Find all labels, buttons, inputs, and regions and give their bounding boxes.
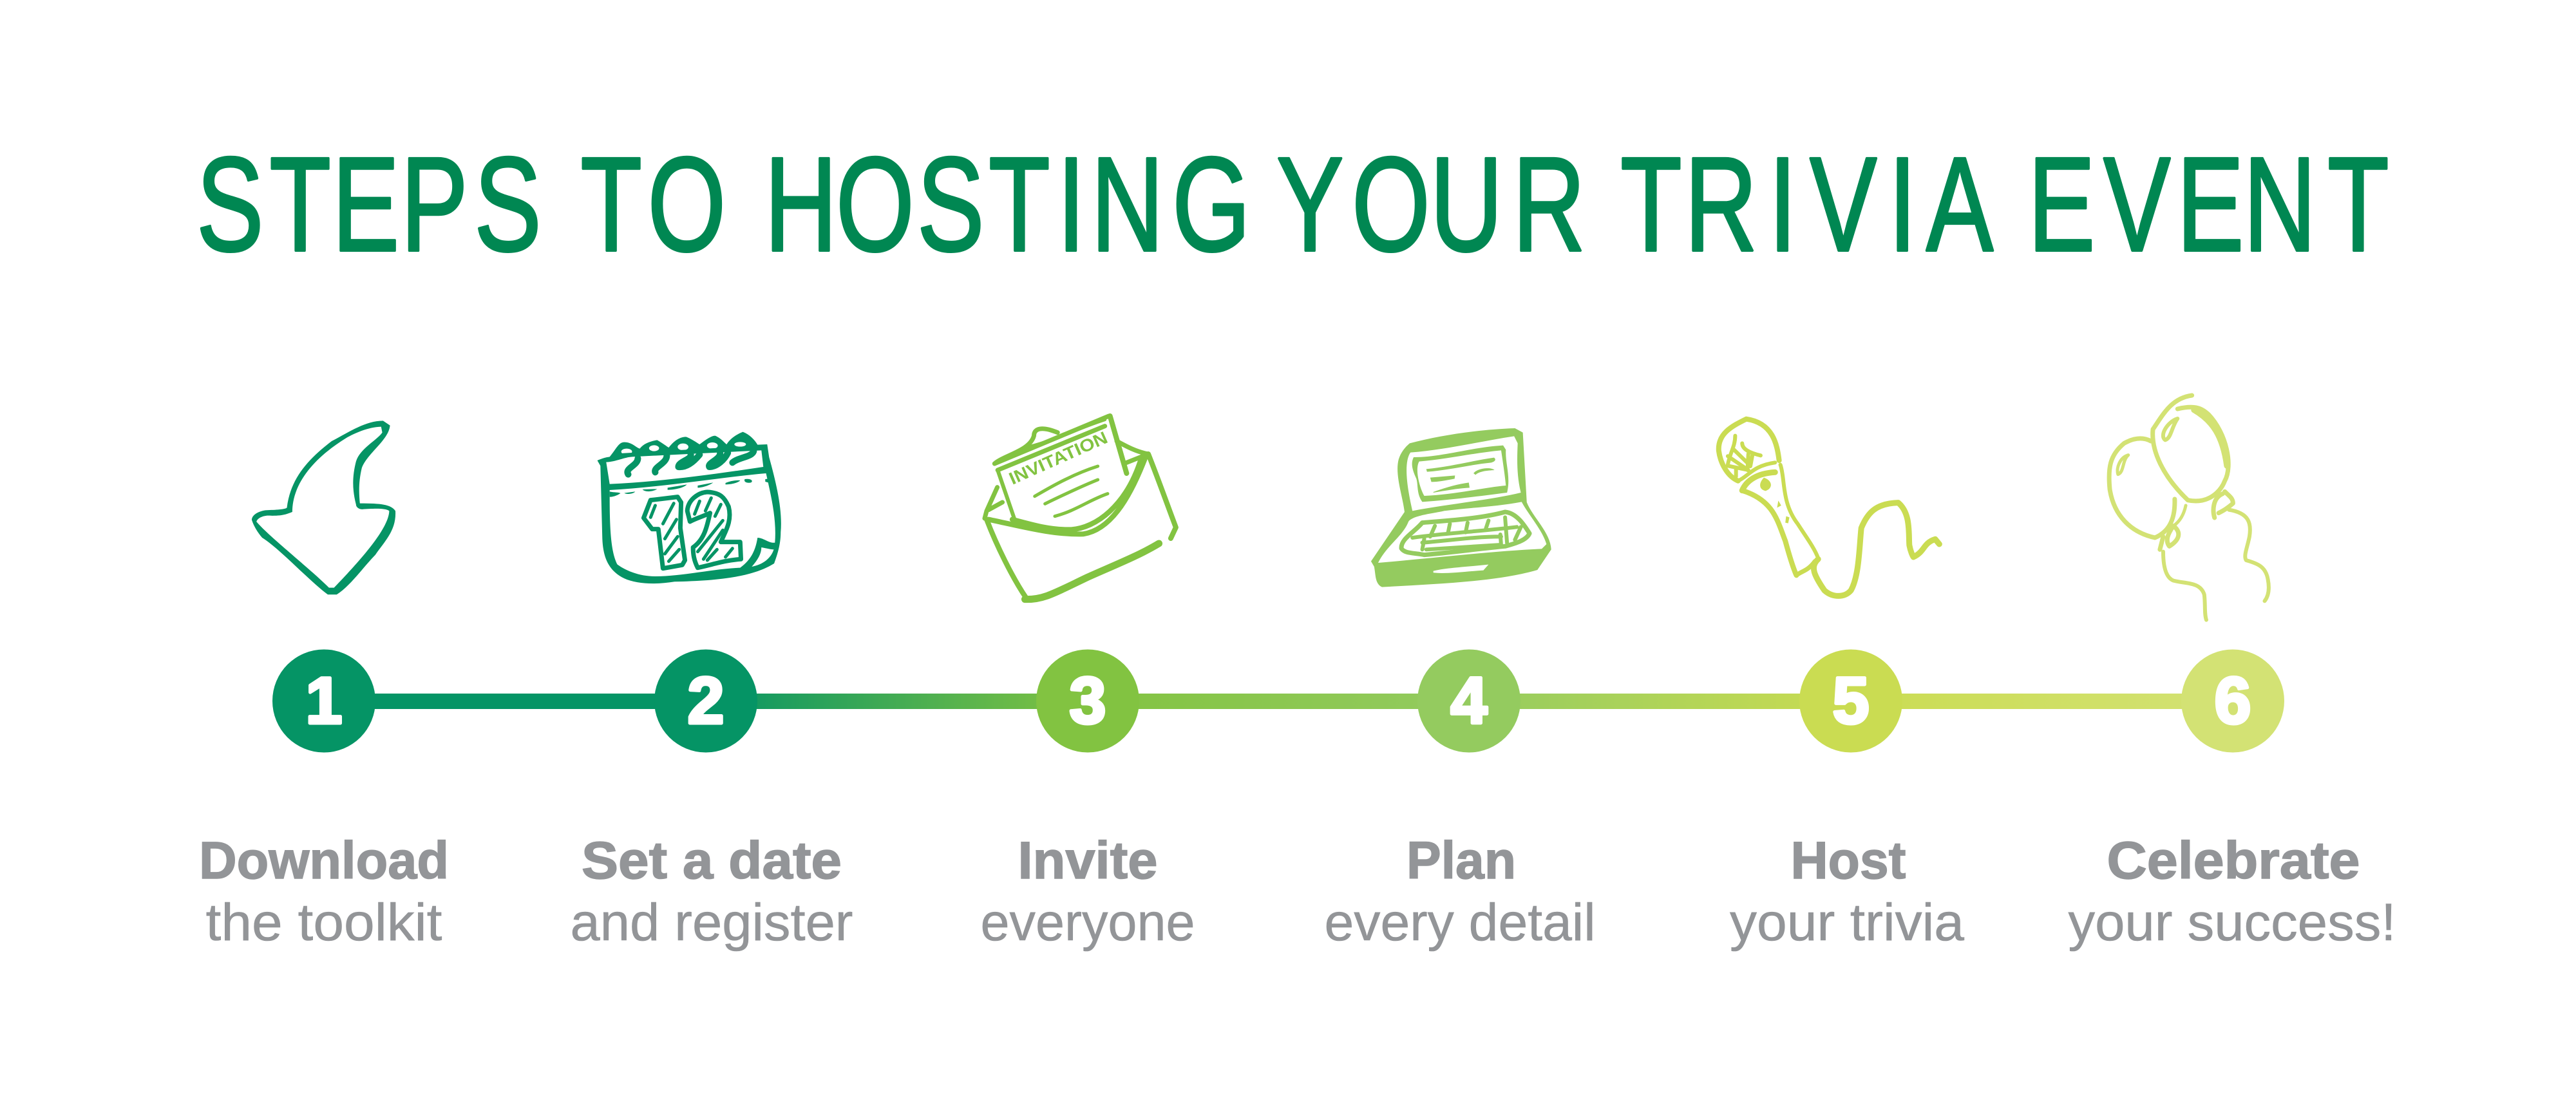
step 4 marker: 4: [1451, 664, 1488, 737]
step 1 label: [199, 831, 449, 952]
step 3 label: everyone: [980, 893, 1195, 952]
step 6 marker: 6: [2215, 664, 2251, 737]
step 1 label: Download: [199, 831, 449, 890]
step 5 label: Host: [1790, 831, 1906, 890]
step 6 marker: [2181, 649, 2284, 752]
step 4 label: Plan: [1406, 831, 1516, 890]
icon: calendar: [598, 432, 781, 583]
step 5 marker: [1799, 649, 1902, 752]
step 1 label: the toolkit: [206, 893, 442, 952]
icon: invitation envelope: [985, 416, 1176, 600]
invitation lettering: INVITATION: [1006, 428, 1110, 488]
microphone cord: [1814, 503, 1939, 596]
step 2 label: Set a date: [582, 831, 842, 890]
icon: download arrow: [252, 421, 395, 594]
icon: balloons: [2109, 395, 2269, 620]
step 4 label: [1324, 831, 1596, 952]
title: STEPS TO HOSTING YOUR TRIVIA EVENT: [196, 129, 2389, 279]
step 6 label: your success!: [2069, 893, 2396, 952]
step 2 label: and register: [571, 893, 853, 952]
step 2 marker: 2: [688, 664, 724, 737]
step 1 marker: [272, 649, 375, 752]
step 4 label: every detail: [1324, 893, 1596, 952]
step 6 label: Celebrate: [2107, 831, 2360, 890]
icon: microphone: [1719, 419, 1939, 596]
step 3 label: Invite: [1018, 831, 1158, 890]
step 3 label: [980, 831, 1195, 952]
step 3 marker: 3: [1070, 664, 1106, 737]
step 1 marker: 1: [306, 664, 342, 737]
step 6 label: [2069, 831, 2396, 952]
step 4 marker: [1417, 649, 1520, 752]
icon: laptop: [1371, 428, 1551, 587]
step 2 marker: [654, 649, 757, 752]
step 3 marker: [1036, 649, 1139, 752]
step 5 label: [1730, 831, 1964, 952]
step 2 label: [571, 831, 853, 952]
step 5 label: your trivia: [1730, 893, 1964, 952]
step 5 marker: 5: [1833, 664, 1869, 737]
timeline connector: [324, 694, 2233, 709]
